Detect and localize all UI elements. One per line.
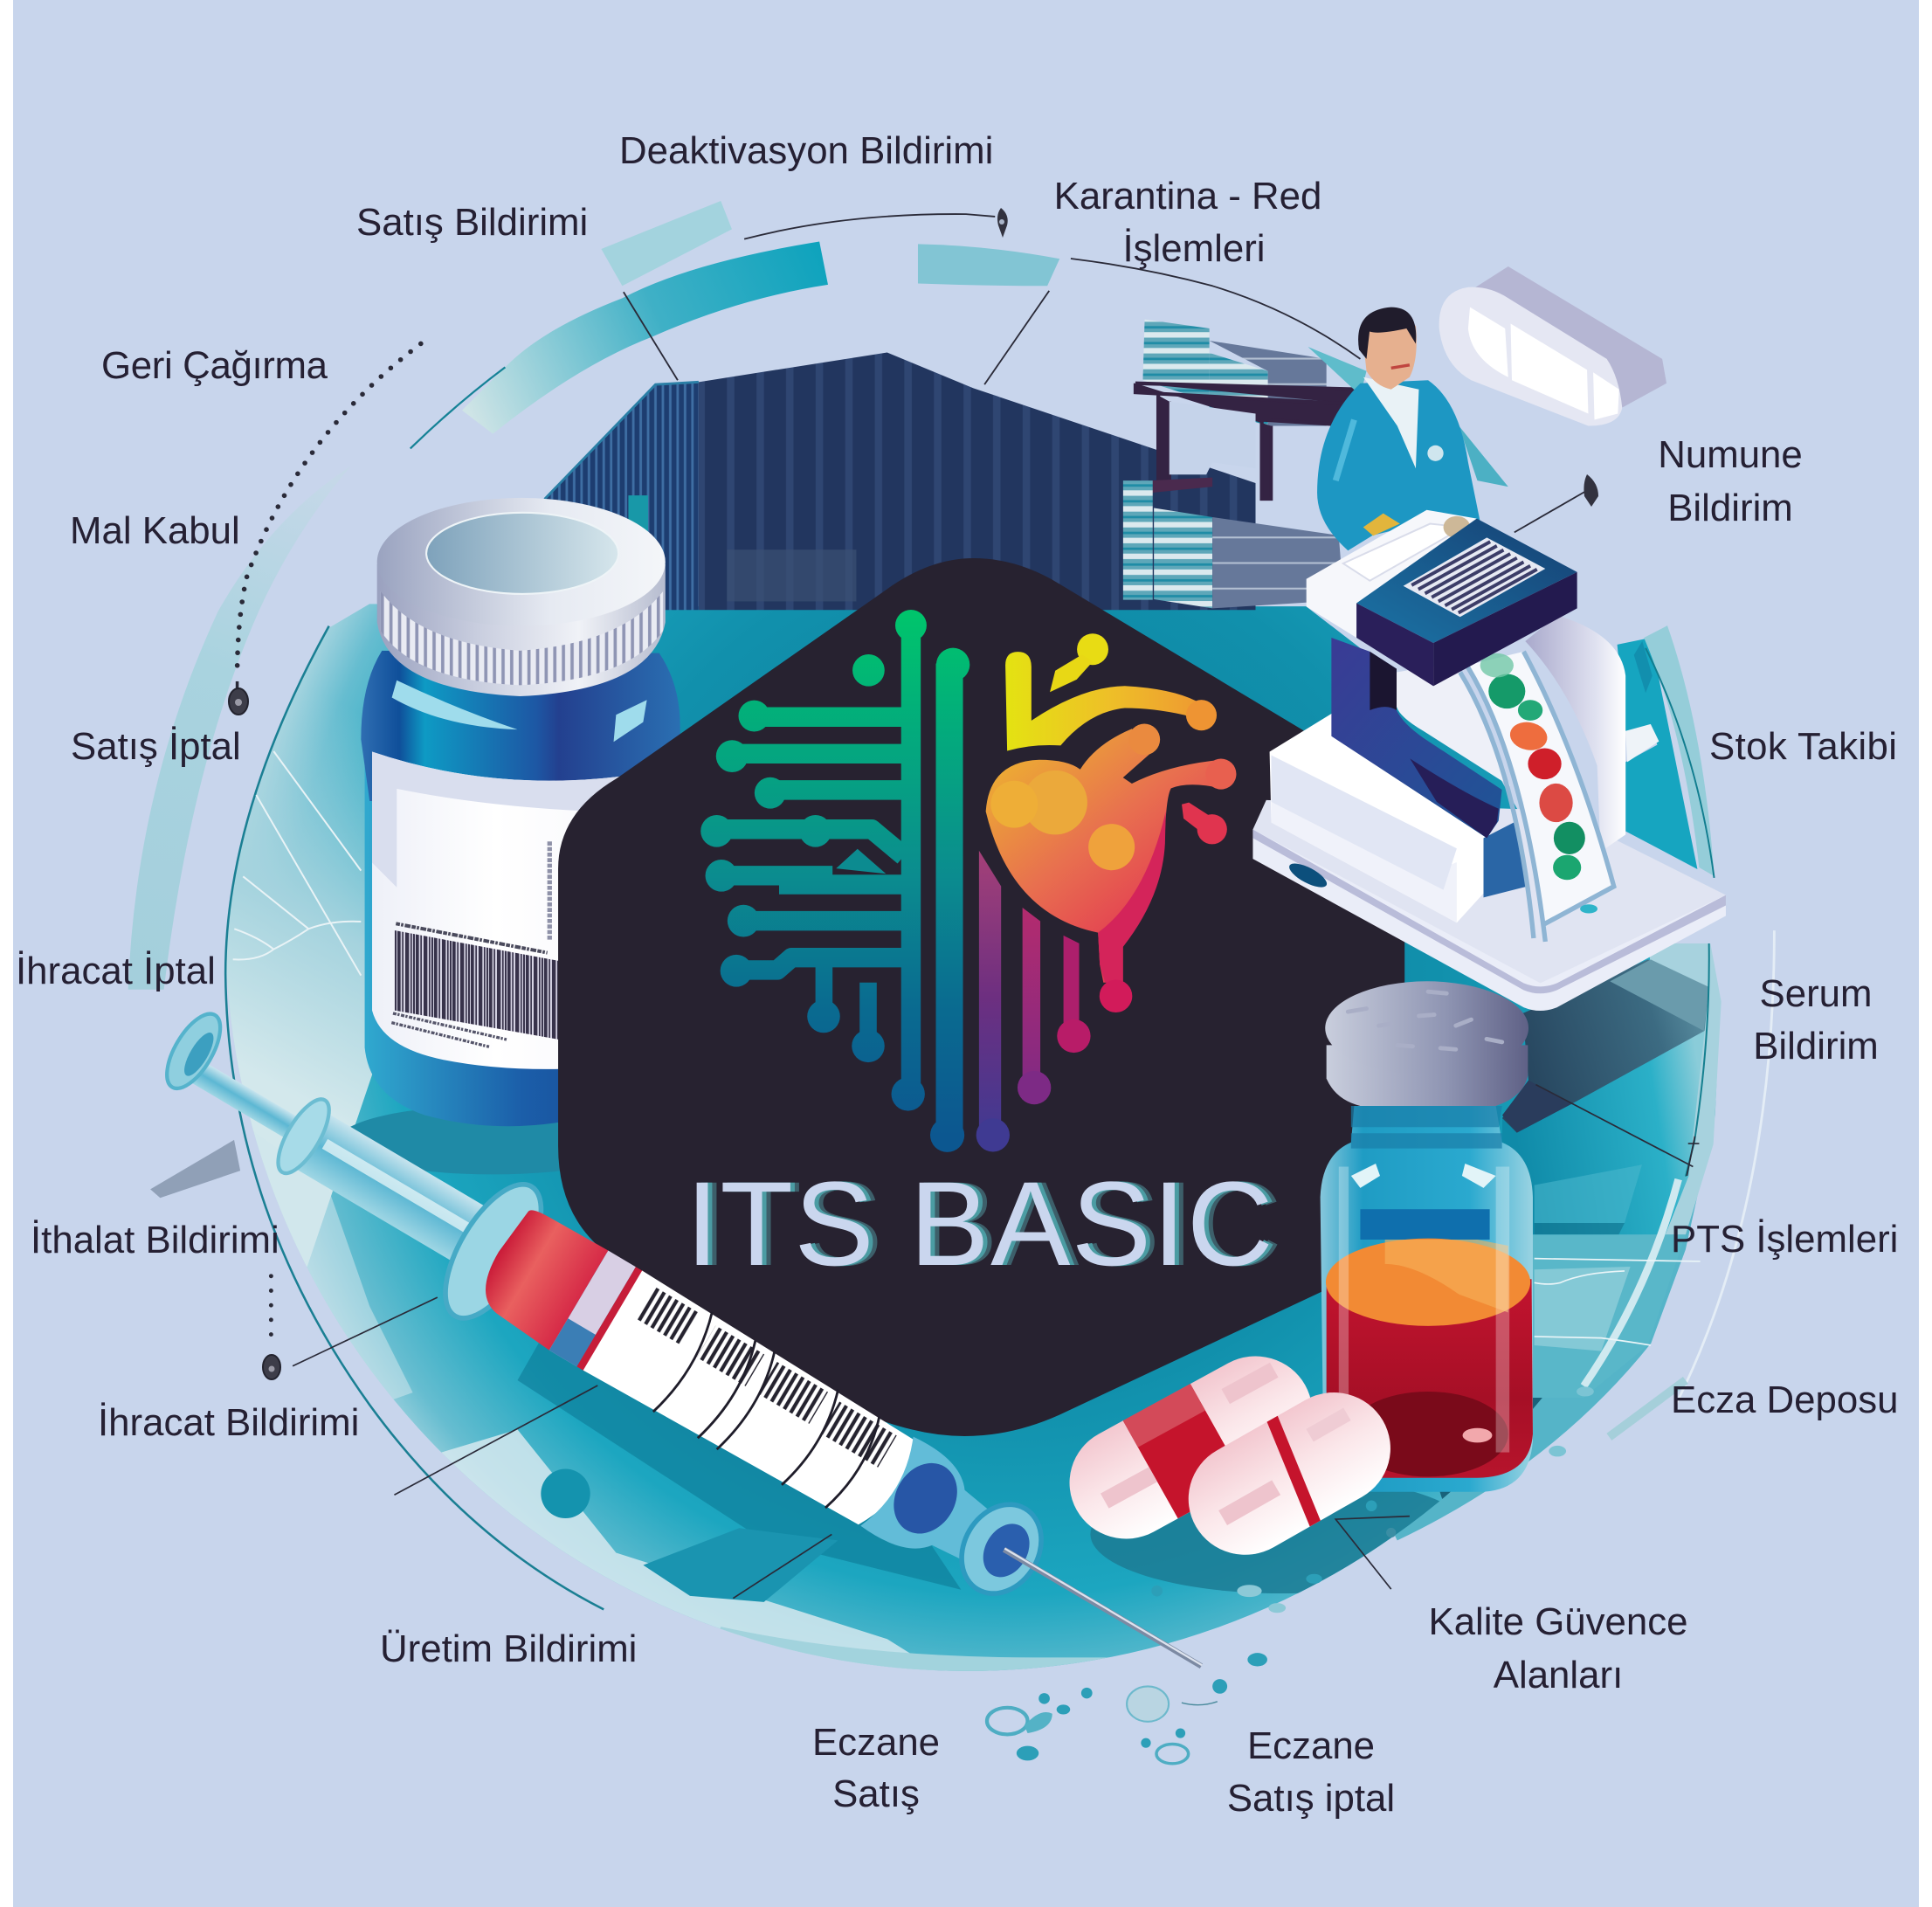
pin: İhracat Bildirimi	[263, 1355, 280, 1379]
title: ITS BASIC: ITS BASIC	[694, 1157, 1283, 1291]
lower stacks	[1123, 480, 1153, 600]
label: Kalite Güvence Alanları: Kalite Güvence	[1428, 1600, 1688, 1643]
vial cap	[1327, 1045, 1528, 1106]
label: Kalite Güvence Alanları: Alanları	[1494, 1654, 1623, 1696]
leader lines and pins upper left	[238, 214, 995, 690]
face	[1360, 326, 1417, 390]
bottle cap	[377, 498, 666, 696]
label: Satış İptal: Satış İptal	[71, 725, 241, 768]
scanner head	[1307, 510, 1477, 638]
glass body	[1321, 1106, 1533, 1492]
right outer ring band	[1356, 1002, 1720, 1540]
central hexagon	[558, 558, 1404, 1436]
right glass panel and shadow	[1502, 943, 1722, 1398]
label: Deaktivasyon Bildirimi: Deaktivasyon Bildirimi	[619, 129, 993, 172]
right lower pale ring	[1676, 930, 1774, 1405]
plunger	[156, 1005, 337, 1159]
title: ITS BASIC: ITS BASIC	[690, 1157, 1279, 1291]
label: Serum Bildirim: Bildirim	[1753, 1025, 1879, 1068]
left ring arc line	[225, 626, 604, 1609]
label: PTS İşlemleri: PTS İşlemleri	[1671, 1218, 1898, 1261]
barcode clusters	[637, 1287, 700, 1345]
dotted line	[268, 1276, 274, 1349]
left glass panel white lines	[233, 751, 361, 976]
illustration backdrop: rings and floor disk	[128, 201, 1787, 1713]
label: Ecza Deposu: Ecza Deposu	[1671, 1378, 1899, 1421]
scanner machine	[1252, 510, 1726, 1011]
white arc band	[1584, 1179, 1679, 1386]
technician	[1308, 307, 1508, 550]
base plate	[1252, 829, 1726, 1011]
pin: Numune	[1584, 474, 1598, 507]
top right ring piece	[918, 244, 1059, 286]
label: Geri Çağırma: Geri Çağırma	[101, 344, 328, 387]
machine cast shadow	[1502, 959, 1709, 1133]
red hub	[469, 1203, 645, 1372]
oval slot	[1287, 859, 1330, 892]
ring marker	[1687, 1137, 1699, 1176]
Kalite leader	[1335, 1517, 1410, 1589]
capsule one	[1049, 1336, 1333, 1558]
Numune leader	[1515, 490, 1588, 532]
title: ITS BASIC: ITS BASIC	[686, 1157, 1274, 1291]
Üretim leader one	[394, 1385, 597, 1495]
pin: Satış İptal	[229, 688, 248, 715]
coat	[1317, 380, 1480, 550]
barrel	[268, 1092, 518, 1287]
capsule two	[1168, 1372, 1411, 1575]
left circuit brain	[700, 610, 969, 1152]
label: İhracat İptal: İhracat İptal	[16, 950, 216, 992]
label: Stok Takibi: Stok Takibi	[1709, 725, 1897, 768]
cap top	[377, 498, 666, 626]
C arm	[1331, 638, 1502, 838]
needle	[1003, 1547, 1203, 1669]
outer left ring band	[128, 466, 351, 990]
Üretim leader two	[733, 1534, 831, 1599]
overhead lamp	[1439, 266, 1666, 425]
label: Numune Bildirim: Numune	[1658, 433, 1803, 476]
flange	[426, 1170, 560, 1333]
label with barcode	[583, 1271, 929, 1540]
label: Karantina - Red İşlemleri: İşlemleri	[1122, 227, 1266, 270]
right ring arc	[1686, 943, 1709, 1177]
blue shoulder	[361, 651, 680, 801]
pin: Deaktivasyon	[997, 208, 1008, 238]
label: Eczane Satış: Satış	[832, 1772, 920, 1815]
dotted arc	[238, 343, 421, 675]
bottle barcode and fine print	[391, 841, 559, 1047]
teal panel behind	[1618, 638, 1697, 869]
upper stacks	[1142, 320, 1210, 402]
label: Üretim Bildirimi: Üretim Bildirimi	[380, 1627, 637, 1670]
warehouse building	[545, 352, 1256, 610]
label	[372, 752, 680, 1069]
red liquid	[1327, 1279, 1533, 1478]
leader lines upper right	[984, 259, 1588, 532]
bottle base shadow	[339, 1105, 647, 1174]
pale glass edge	[1648, 943, 1722, 1234]
Satış leader	[624, 292, 678, 380]
thin glass lines	[1535, 1259, 1701, 1345]
serum vial	[1321, 981, 1533, 1492]
label: Numune Bildirim: Bildirim	[1667, 487, 1793, 529]
heart	[986, 724, 1236, 1012]
label: Eczane Satış: Eczane	[812, 1721, 940, 1764]
technician arc	[1071, 259, 1360, 359]
syringe	[129, 994, 1238, 1734]
capsules	[1049, 1336, 1411, 1575]
label: İthalat Bildirimi: İthalat Bildirimi	[31, 1219, 279, 1261]
shelf frame	[1135, 383, 1360, 499]
back arch	[1525, 615, 1625, 852]
Deaktivasyon leader	[744, 214, 995, 239]
teal wall	[1502, 1031, 1705, 1234]
bottle lower body	[365, 764, 680, 1126]
ground shadow of plunger	[150, 1140, 240, 1198]
label: Eczane Satış iptal: Eczane	[1247, 1724, 1375, 1767]
cap ribs	[381, 591, 663, 685]
right circuit lines	[976, 851, 1091, 1152]
shelves with boxes	[1123, 320, 1360, 608]
label: Eczane Satış iptal: Satış iptal	[1227, 1777, 1395, 1820]
label: Serum Bildirim: Serum	[1759, 972, 1873, 1015]
medicine bottle	[339, 651, 680, 1174]
top pale ring piece	[601, 201, 732, 286]
label: Karantina - Red İşlemleri: Karantina - Red	[1054, 175, 1321, 218]
lower right ring piece	[1609, 1380, 1686, 1437]
barcode label	[1404, 537, 1545, 617]
lower glass	[1535, 1164, 1642, 1223]
Karantina leader	[984, 291, 1049, 384]
thin ring accent left top	[411, 367, 505, 448]
lower body	[1270, 714, 1490, 922]
pin left stem	[235, 681, 239, 690]
İhracat leader	[293, 1297, 438, 1366]
yellow vessels	[1005, 633, 1227, 844]
top ring band	[462, 241, 828, 434]
leader lines lower right	[1335, 1085, 1699, 1589]
floor disk	[227, 604, 1651, 1671]
Serum leader	[1535, 1085, 1693, 1167]
label: İhracat Bildirimi: İhracat Bildirimi	[98, 1401, 359, 1444]
water droplets	[987, 1386, 1594, 1764]
nozzle	[860, 1436, 1060, 1613]
lower blue	[1484, 821, 1527, 897]
pill chute	[1460, 652, 1614, 942]
label: Satış Bildirimi: Satış Bildirimi	[356, 201, 588, 244]
leader lines lower left	[271, 1276, 831, 1599]
logo: circuit tree and heart	[700, 610, 1236, 1152]
label: Mal Kabul: Mal Kabul	[70, 509, 240, 552]
